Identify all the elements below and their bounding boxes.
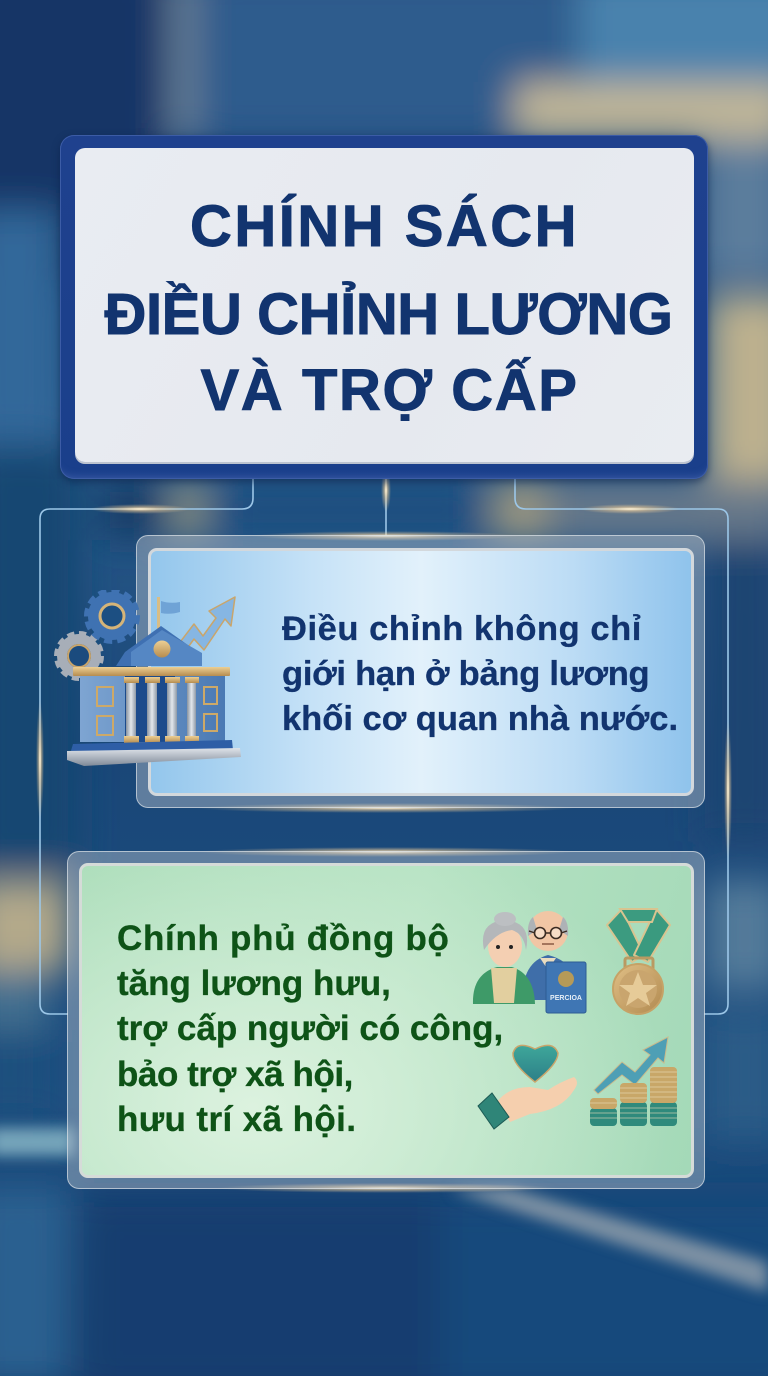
icon: coin stacks with rising arrow [590,1036,677,1126]
icon: elderly couple with pension book [472,911,586,1014]
heading [104,194,673,423]
panel text: Điều chỉnh không chỉ [282,610,642,648]
panel: title [60,135,708,479]
roof [116,626,202,666]
columns [124,677,199,743]
rising arrow [174,597,235,650]
coin stack tall [650,1067,677,1126]
panel: social benefits [67,851,705,1189]
panel text: bảo trợ xã hội, [117,1055,353,1094]
panel text: tăng lương hưu, [117,964,391,1003]
grandfather [522,911,574,1000]
heading: VÀ TRỢ CẤP [200,358,579,423]
panel: government adjustment [136,535,705,808]
title card [75,148,694,462]
blue gear [87,591,137,641]
panel text: giới hạn ở bảng lương [282,655,649,693]
panel text [117,919,503,1139]
grandmother [473,912,535,1004]
coin stack medium [620,1083,647,1126]
building body [80,676,225,742]
panel text: khối cơ quan nhà nước. [282,700,678,738]
panel text: Chính phủ đồng bộ [117,919,450,958]
entablature [73,667,230,676]
pension book: PERCIOA [550,995,582,1002]
base [67,740,241,766]
heading: ĐIỀU CHỈNH LƯƠNG [104,282,673,347]
panel text: trợ cấp người có công, [117,1009,503,1048]
panel text [282,610,678,738]
icon: government building with gears and rising arrow [54,590,241,766]
grey gear [57,634,101,678]
green card [79,863,694,1178]
panel text: hưu trí xã hội. [117,1100,356,1139]
heading: CHÍNH SÁCH [190,194,579,259]
icon: caring hand with heart [477,1044,577,1130]
flag [157,597,180,631]
coin stack small [590,1098,617,1126]
icon: medal [606,908,671,1015]
blue card [148,548,694,796]
